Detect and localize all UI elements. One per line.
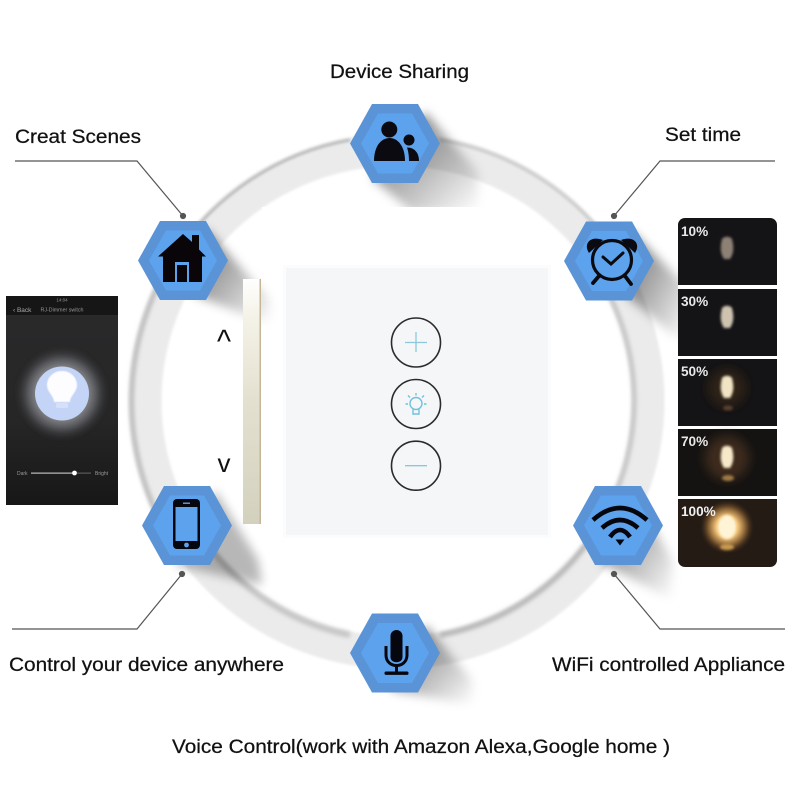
- status bar: 14:04: [56, 298, 68, 302]
- plus button: [392, 318, 440, 367]
- bulb glyph: [47, 371, 77, 402]
- leader line: Control your device anywhere: [12, 572, 184, 629]
- light button: [392, 380, 440, 428]
- brightness slider: Dark: [17, 471, 28, 477]
- label: Voice Control: Voice Control(work with Amazon Alexa,Google home ): [172, 737, 670, 758]
- label: Creat Scenes: Creat Scenes: [15, 127, 141, 148]
- hexagon icon: alarm clock: [564, 222, 654, 300]
- level 10%: [678, 218, 777, 285]
- hexagon cast shadows: [175, 112, 685, 705]
- level 10%: 10%: [681, 224, 708, 239]
- level 100%: 100%: [681, 504, 716, 519]
- hexagon icon: wifi: [573, 486, 663, 565]
- level 30%: 30%: [681, 294, 708, 309]
- minus button: [392, 441, 440, 490]
- level 70%: 70%: [681, 434, 708, 449]
- hexagon icon: microphone: [350, 614, 440, 692]
- level 30%: [678, 289, 777, 356]
- level 70%: [678, 429, 777, 496]
- wall switch panel: [283, 265, 551, 538]
- ring: [132, 140, 648, 652]
- level 100%: [678, 499, 777, 567]
- label: Control your device anywhere: Control your device anywhere: [9, 655, 284, 676]
- app screenshot: [6, 296, 118, 505]
- label: Set time: Set time: [665, 125, 741, 146]
- hexagon icon: device sharing people: [350, 104, 440, 183]
- label: Device Sharing: Device Sharing: [330, 62, 469, 83]
- up arrow mark: ^: [217, 323, 231, 359]
- dimming levels strip: [678, 218, 777, 567]
- leader line: Set time: [612, 161, 775, 218]
- brightness slider: Bright: [95, 471, 109, 477]
- down arrow mark: v: [218, 450, 231, 478]
- level 50%: 50%: [681, 364, 708, 379]
- hexagon icon: smartphone: [142, 486, 232, 565]
- leader line: WiFi controlled Appliance: [612, 572, 785, 629]
- level 50%: [678, 359, 777, 426]
- leader line: Creat Scenes: [15, 161, 186, 218]
- label: WiFi controlled Appliance: WiFi controlled Appliance: [552, 655, 785, 676]
- brightness slider: [17, 471, 109, 477]
- side view strip: [243, 279, 261, 524]
- app title: RJ-Dimmer switch: [41, 308, 84, 314]
- app header: ‹ Back: [13, 307, 32, 314]
- hexagon icon: house: [138, 221, 228, 300]
- white cover behind the switch: [262, 207, 512, 267]
